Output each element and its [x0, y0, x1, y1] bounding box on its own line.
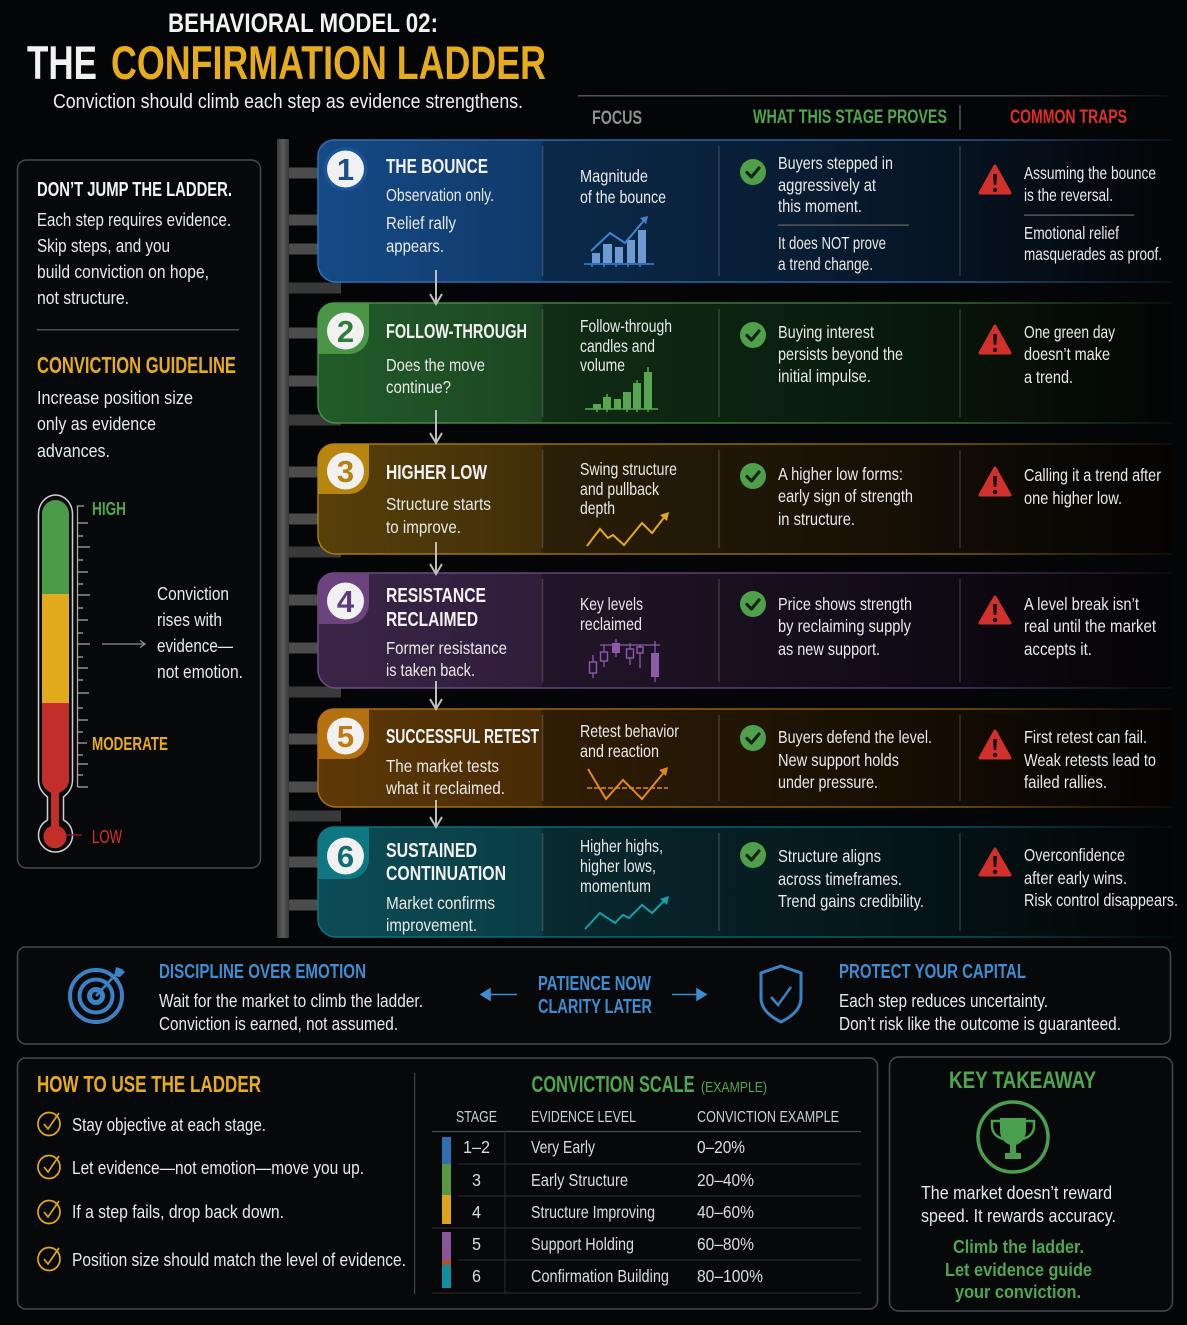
title block: CONFIRMATION LADDER	[111, 36, 546, 89]
text: climb the ladder: your conviction.	[955, 1282, 1081, 1302]
focus text	[580, 836, 663, 896]
step number 5: 5	[337, 719, 354, 754]
text: the market doesn't reward speed	[921, 1182, 1116, 1226]
proves text: initial impulse.	[778, 366, 871, 386]
focus text	[580, 316, 672, 375]
card 6: sustained continuation	[318, 827, 1178, 937]
focus text: Higher highs,	[580, 836, 663, 856]
stage text: SUCCESSFUL RETEST	[386, 726, 539, 748]
proves text: in structure.	[778, 509, 855, 529]
text: increase position size: Increase position size	[37, 387, 193, 408]
step number 3	[318, 444, 369, 494]
ladder rails and rungs	[277, 139, 341, 938]
proves text	[740, 322, 903, 386]
stage text: FOLLOW-THROUGH	[386, 321, 527, 343]
proves text: It does NOT prove	[778, 233, 886, 253]
stage text: HIGHER LOW	[386, 462, 487, 484]
checklist: Stay objective at each stage.	[72, 1114, 266, 1135]
text: increase position size	[37, 387, 193, 461]
text: protect your capital	[839, 961, 1121, 1034]
gauge labels	[92, 499, 168, 847]
arrow: left	[481, 989, 517, 1000]
proves text: Buyers stepped in	[778, 153, 893, 173]
text: increase position size: only as evidence	[37, 413, 156, 434]
stage text: Market confirms	[386, 893, 495, 913]
checklist: Position size should match the level of evidence.	[72, 1249, 406, 1270]
text: conviction rises with evidence: not emotion.	[157, 661, 243, 682]
text: protect your capital: PROTECT YOUR CAPITAL	[839, 961, 1026, 983]
trap text: Emotional relief	[1024, 223, 1119, 243]
focus text	[580, 594, 643, 634]
proves text	[740, 842, 924, 911]
stage text: THE BOUNCE	[386, 156, 488, 178]
heading: conviction guideline: CONVICTION GUIDELINE	[37, 352, 236, 378]
arrows between ladder steps	[430, 270, 442, 827]
table: conviction scale: Confirmation Building	[531, 1266, 669, 1286]
proves text	[740, 725, 932, 792]
step number 4: 4	[337, 584, 355, 619]
band: discipline and capital	[18, 947, 1170, 1044]
stage text: Former resistance	[386, 638, 507, 658]
table: conviction scale: 6	[472, 1266, 481, 1286]
text: discipline over emotion: DISCIPLINE OVER EMOTION	[159, 961, 366, 983]
text: increase position size: advances.	[37, 440, 110, 461]
trap text: One green day	[1024, 322, 1115, 342]
stage text	[385, 726, 539, 798]
trap text: Weak retests lead to	[1024, 750, 1156, 770]
text: each step requires evidence: Skip steps, and you	[37, 235, 170, 256]
card 2: follow-through	[318, 303, 1172, 423]
proves text: across timeframes.	[778, 869, 902, 889]
focus text: volume	[580, 355, 625, 375]
checklist: Let evidence—not emotion—move you up.	[72, 1157, 364, 1178]
icon: trophy	[978, 1102, 1048, 1172]
icon: trend line	[585, 896, 669, 929]
card 4: resistance reclaimed	[318, 573, 1172, 688]
proves text: Buying interest	[778, 322, 874, 342]
step number 6: 6	[337, 839, 354, 874]
text: protect your capital: Each step reduces uncertainty.	[839, 990, 1048, 1011]
title block: BEHAVIORAL MODEL 02:	[168, 8, 438, 38]
table: conviction scale: CONVICTION EXAMPLE	[697, 1109, 839, 1126]
table: conviction scale: 4	[472, 1202, 481, 1222]
heading: don't jump: DON’T JUMP THE LADDER.	[37, 179, 232, 201]
stage colour bar	[442, 1137, 451, 1288]
proves text	[740, 591, 912, 659]
gauge labels: HIGH	[92, 499, 126, 519]
table: conviction scale: 60–80%	[697, 1234, 754, 1254]
proves text: by reclaiming supply	[778, 616, 911, 636]
text: each step requires evidence: build conviction on hope,	[37, 261, 209, 282]
column headers	[578, 95, 1168, 130]
title block	[27, 8, 546, 113]
focus text: and pullback	[580, 479, 659, 499]
focus text: momentum	[580, 876, 651, 896]
step number 3: 3	[337, 454, 354, 489]
trap text	[980, 465, 1161, 508]
table: conviction scale: 3	[472, 1170, 481, 1190]
stage text: RESISTANCE	[386, 585, 486, 607]
text: the market doesn't reward speed: The market doesn’t reward	[921, 1182, 1112, 1203]
text: climb the ladder: Let evidence guide	[945, 1260, 1092, 1280]
text: conviction rises with evidence: evidence—	[157, 635, 233, 656]
stage text: Relief rally	[386, 213, 456, 233]
text: protect your capital: Don’t risk like the outcome is guaranteed.	[839, 1013, 1121, 1034]
trap text: failed rallies.	[1024, 772, 1107, 792]
stage text: continue?	[386, 377, 451, 397]
gauge labels: LOW	[92, 827, 122, 847]
card 1: the bounce	[318, 140, 1172, 282]
text: patience now, clarity later	[538, 973, 652, 1018]
trap text: is the reversal.	[1024, 185, 1113, 205]
step number 6	[318, 827, 369, 879]
proves text	[740, 153, 909, 274]
text: discipline over emotion: Wait for the market to climb the ladder.	[159, 990, 423, 1011]
panel: how to use and conviction scale	[18, 1058, 878, 1309]
column headers: COMMON TRAPS	[1010, 107, 1127, 128]
stage text	[386, 840, 506, 935]
text: each step requires evidence: not structure.	[37, 287, 129, 308]
stage text: what it reclaimed.	[385, 778, 505, 798]
text: each step requires evidence: Each step requires evidence.	[37, 209, 231, 230]
trap text: accepts it.	[1024, 639, 1092, 659]
step number 2: 2	[337, 314, 354, 349]
scale ticks	[78, 506, 90, 787]
proves text: early sign of strength	[778, 486, 913, 506]
trap text	[980, 163, 1162, 264]
proves text	[740, 463, 913, 529]
stage text: The market tests	[386, 756, 499, 776]
stage text: RECLAIMED	[386, 609, 478, 631]
thermometer gauge	[38, 495, 168, 852]
table: conviction scale: 1–2	[463, 1137, 490, 1157]
focus text: Magnitude	[580, 166, 648, 186]
table: conviction scale: 40–60%	[697, 1202, 754, 1222]
stage text: is taken back.	[386, 660, 475, 680]
proves text: Buyers defend the level.	[778, 727, 932, 747]
trap text: Calling it a trend after	[1024, 465, 1161, 485]
icon: retest line	[587, 767, 668, 799]
stage text	[386, 462, 491, 537]
text: conviction rises with evidence: rises with	[157, 609, 222, 630]
column headers: FOCUS	[592, 108, 642, 129]
panel: key takeaway	[890, 1057, 1172, 1311]
proves text: as new support.	[778, 639, 880, 659]
focus text: Key levels	[580, 594, 643, 614]
text: climb the ladder: Climb the ladder.	[953, 1237, 1084, 1257]
trap text	[980, 322, 1115, 387]
gauge labels: MODERATE	[92, 734, 168, 754]
focus text: Retest behavior	[580, 721, 679, 741]
icon: target	[70, 967, 125, 1022]
trap text: a trend.	[1024, 367, 1073, 387]
stage text: CONTINUATION	[386, 863, 506, 885]
step number 1	[324, 147, 368, 191]
proves text: this moment.	[778, 196, 862, 216]
text: patience now, clarity later: CLARITY LATER	[538, 996, 652, 1018]
table: conviction scale: 0–20%	[697, 1137, 745, 1157]
trap text	[980, 845, 1178, 910]
trap text: Overconfidence	[1024, 845, 1125, 865]
proves text: Price shows strength	[778, 594, 912, 614]
text: conviction rises with evidence: Conviction	[157, 583, 229, 604]
icon: candlesticks	[590, 639, 660, 682]
proves text: Structure aligns	[778, 846, 881, 866]
card 5: successful retest	[318, 709, 1172, 807]
step number 2	[318, 303, 369, 354]
checklist	[38, 1112, 406, 1270]
proves text: A higher low forms:	[778, 464, 903, 484]
column headers: WHAT THIS STAGE PROVES	[753, 107, 947, 128]
trap text: real until the market	[1024, 616, 1156, 636]
title block: THE	[27, 36, 97, 89]
trap text: after early wins.	[1024, 868, 1127, 888]
stage text: Observation only.	[386, 185, 494, 205]
text: patience now, clarity later: PATIENCE NOW	[538, 973, 651, 995]
stage text: Does the move	[386, 355, 485, 375]
arrow: right	[672, 989, 706, 1000]
heading: key takeaway: KEY TAKEAWAY	[949, 1067, 1096, 1094]
focus text: higher lows,	[580, 856, 656, 876]
stage text	[386, 156, 494, 256]
focus text: Follow-through	[580, 316, 672, 336]
arrow: gauge to note	[102, 640, 145, 648]
icon: bar chart with rising arrow	[584, 216, 654, 267]
table: conviction scale: 5	[472, 1234, 481, 1254]
table: conviction scale	[432, 1109, 861, 1293]
table: conviction scale: 20–40%	[697, 1170, 754, 1190]
focus text	[580, 166, 666, 207]
proves text: aggressively at	[778, 175, 876, 195]
stage text	[386, 585, 507, 680]
trap text: First retest can fail.	[1024, 727, 1147, 747]
stage text: improvement.	[386, 915, 477, 935]
step number 1: 1	[337, 152, 354, 187]
left panel: don't jump the ladder	[18, 160, 260, 868]
proves text: a trend change.	[778, 254, 873, 274]
stage text: appears.	[386, 236, 444, 256]
table: conviction scale: Support Holding	[531, 1234, 634, 1254]
heading: conviction scale: (EXAMPLE)	[701, 1079, 767, 1096]
focus text: reclaimed	[580, 614, 642, 634]
text: climb the ladder	[945, 1237, 1092, 1302]
stage text: to improve.	[386, 517, 461, 537]
heading: how to use the ladder: HOW TO USE THE LADDER	[37, 1071, 261, 1097]
checklist: If a step fails, drop back down.	[72, 1201, 284, 1222]
trap text	[980, 727, 1156, 792]
heading: conviction scale: CONVICTION SCALE	[532, 1071, 694, 1097]
text: discipline over emotion: Conviction is earned, not assumed.	[159, 1013, 398, 1034]
step number 5	[318, 709, 369, 759]
trap text: A level break isn’t	[1024, 594, 1139, 614]
icon: volume bars	[585, 367, 658, 412]
stage text	[386, 321, 527, 397]
text: discipline over emotion	[159, 961, 423, 1034]
focus text: depth	[580, 498, 615, 518]
proves text: persists beyond the	[778, 344, 903, 364]
proves text: New support holds	[778, 750, 899, 770]
trap text: doesn’t make	[1024, 344, 1110, 364]
icon: shield	[761, 966, 801, 1022]
trap text: one higher low.	[1024, 488, 1122, 508]
table: conviction scale: STAGE	[456, 1109, 497, 1126]
table: conviction scale: Structure Improving	[531, 1202, 655, 1222]
focus text: of the bounce	[580, 187, 666, 207]
proves text: Trend gains credibility.	[778, 891, 924, 911]
table: conviction scale: 80–100%	[697, 1266, 763, 1286]
table: conviction scale: Very Early	[531, 1137, 595, 1157]
icon: swing line	[587, 512, 669, 546]
step number 4	[318, 573, 369, 624]
title block: Conviction should climb each step as evidence strengthens.	[53, 91, 523, 113]
trap text	[980, 594, 1156, 659]
card 3: higher low	[318, 444, 1172, 554]
focus text	[580, 459, 677, 518]
focus text: and reaction	[580, 741, 659, 761]
table: conviction scale: Early Structure	[531, 1170, 628, 1190]
proves text: under pressure.	[778, 772, 878, 792]
focus text: candles and	[580, 336, 655, 356]
focus text	[580, 721, 679, 761]
text: the market doesn't reward speed: speed. It rewards accuracy.	[921, 1205, 1116, 1226]
stage text: Structure starts	[386, 494, 491, 514]
focus text: Swing structure	[580, 459, 677, 479]
table: conviction scale: EVIDENCE LEVEL	[531, 1109, 636, 1126]
text: each step requires evidence	[37, 209, 231, 308]
text: conviction rises with evidence	[157, 583, 243, 682]
stage text: SUSTAINED	[386, 840, 477, 862]
